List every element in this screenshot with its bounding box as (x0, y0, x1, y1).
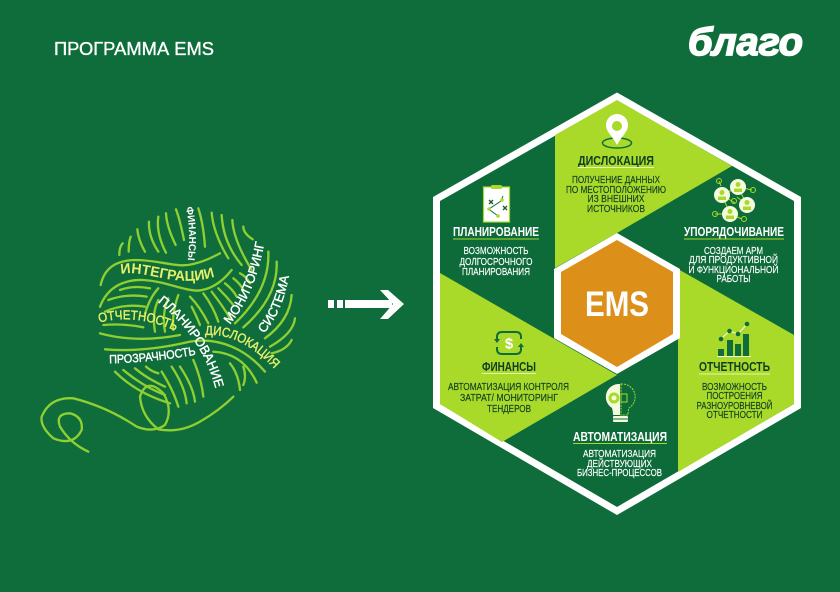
section: reporting: ОТЧЕТНОСТИ (706, 409, 762, 421)
logo: благо (688, 21, 803, 64)
yarn words: ОТЧЕТНОСТЬ (98, 310, 177, 330)
section: dislocation: ПОЛУЧЕНИЕ ДАННЫХ (572, 174, 660, 186)
icon: bar chart (717, 322, 751, 357)
section: finance: ТЕНДЕРОВ (487, 403, 531, 415)
yarn words: ПРОЗРАЧНОСТЬ (110, 347, 196, 364)
icon: connected people (712, 178, 756, 222)
section: dislocation: ИЗ ВНЕШНИХ (588, 193, 644, 205)
icon: light bulb with gear (606, 384, 635, 422)
yarn words: ИНТЕГРАЦИИ (120, 263, 214, 284)
section: ordering: РАБОТЫ (716, 273, 750, 285)
center hexagon: EMS (585, 285, 649, 324)
section: ordering: УПОРЯДОЧИВАНИЕ (684, 224, 784, 239)
icon: clipboard (484, 185, 510, 222)
section: planning (453, 185, 539, 278)
title: ПРОГРАММА EMS (54, 39, 214, 59)
section: automation (573, 384, 667, 479)
section: finance: ФИНАНСЫ (482, 359, 536, 374)
section: ordering (684, 178, 784, 285)
section: reporting: РАЗНОУРОВНЕВОЙ (696, 399, 772, 412)
section: planning: ДОЛГОСРОЧНОГО (460, 256, 532, 268)
section: dislocation: ИСТОЧНИКОВ (587, 203, 645, 215)
center hexagon (554, 233, 680, 374)
section: reporting: ВОЗМОЖНОСТЬ (702, 381, 767, 393)
yarn words: ПЛАНИРОВАНИЕ (158, 295, 224, 388)
section: ordering: ДЛЯ ПРОДУКТИВНОЙ (689, 253, 778, 266)
section: ordering: И ФУНКЦИОНАЛЬНОЙ (688, 263, 778, 276)
section: planning: ПЛАНИРОВАНИЯ (462, 266, 530, 278)
hexagon diagram (436, 96, 798, 511)
blade: left (440, 273, 617, 442)
yarn words: ФИНАНСЫ (186, 206, 196, 260)
section: finance: ЗАТРАТ/ МОНИТОРИНГ (460, 392, 558, 404)
section: reporting (696, 322, 772, 421)
section: automation: БИЗНЕС-ПРОЦЕССОВ (577, 467, 662, 479)
section: reporting: ОТЧЕТНОСТЬ (699, 359, 770, 374)
icon: map pin (602, 114, 632, 148)
section: ordering: СОЗДАЕМ АРМ (704, 245, 763, 257)
section: dislocation: ДИСЛОКАЦИЯ (578, 153, 654, 168)
section: automation: АВТОМАТИЗАЦИЯ (573, 429, 667, 444)
yarn ball word cloud (40, 206, 296, 453)
section: planning: ВОЗМОЖНОСТЬ (464, 245, 529, 257)
section: dislocation: ПО МЕСТОПОЛОЖЕНИЮ (566, 184, 666, 196)
blade: right (678, 269, 794, 472)
section: automation: АВТОМАТИЗАЦИЯ (583, 448, 656, 460)
yarn words: ДИСЛОКАЦИЯ (204, 326, 280, 368)
yarn strands (41, 208, 295, 452)
icon: dollar cycle: $ (505, 336, 514, 352)
arrow (328, 290, 404, 319)
section: reporting: ПОСТРОЕНИЯ (706, 390, 762, 402)
section: dislocation (566, 114, 666, 215)
section: finance: АВТОМАТИЗАЦИЯ КОНТРОЛЯ (448, 381, 569, 393)
yarn words: МОНИТОРИНГ (223, 241, 264, 324)
yarn words: СИСТЕМА (258, 276, 290, 332)
blade: top (555, 100, 732, 268)
hexagon frame (436, 96, 798, 511)
section: automation: ДЕЙСТВУЮЩИХ (587, 457, 652, 470)
section: finance (448, 332, 569, 415)
yarn words (98, 206, 290, 388)
section: planning: ПЛАНИРОВАНИЕ (453, 224, 539, 239)
